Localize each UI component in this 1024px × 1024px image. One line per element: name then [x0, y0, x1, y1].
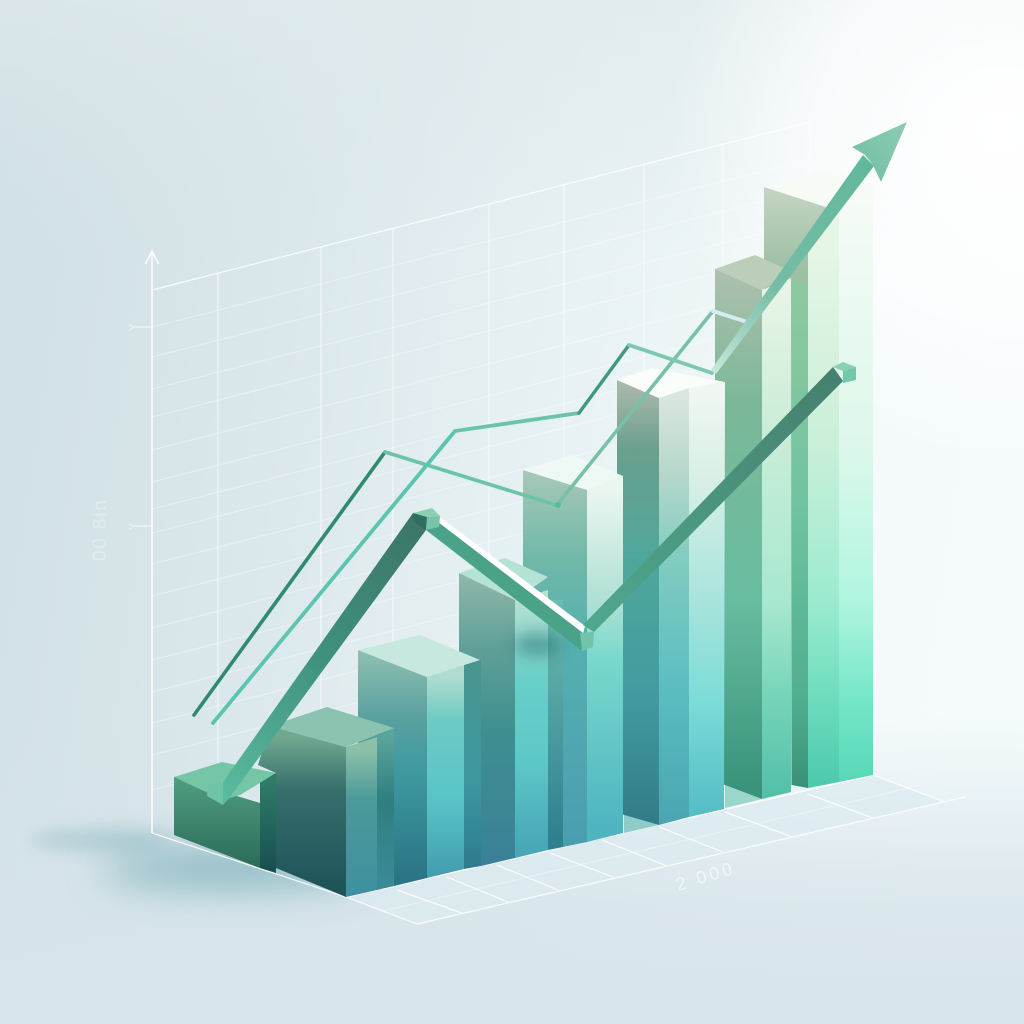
bar 3 — [358, 635, 481, 886]
node: line end — [833, 362, 856, 383]
bar 8 — [764, 170, 873, 788]
bar 2 — [258, 707, 394, 897]
thick line: left rising segment — [207, 513, 426, 805]
bar 1 — [174, 762, 276, 873]
bar 5 — [523, 455, 623, 850]
bar 4 — [459, 558, 561, 866]
bar 6 — [617, 368, 725, 833]
thin line: dark series — [194, 311, 747, 715]
y axis with arrow — [129, 251, 158, 833]
node: valley — [580, 632, 594, 651]
bar 7 — [715, 255, 793, 808]
floor shadow — [30, 828, 370, 888]
thick line: falling segment — [426, 517, 585, 650]
y axis label: 00 8in — [90, 500, 111, 561]
thick line: right rising segment — [583, 367, 843, 632]
node: peak — [413, 508, 440, 530]
floor grid — [152, 775, 965, 924]
x axis label: 2 000 — [673, 859, 735, 895]
thin line: light series — [213, 345, 712, 723]
back wall grid — [152, 122, 810, 790]
trend arrow — [711, 122, 907, 374]
